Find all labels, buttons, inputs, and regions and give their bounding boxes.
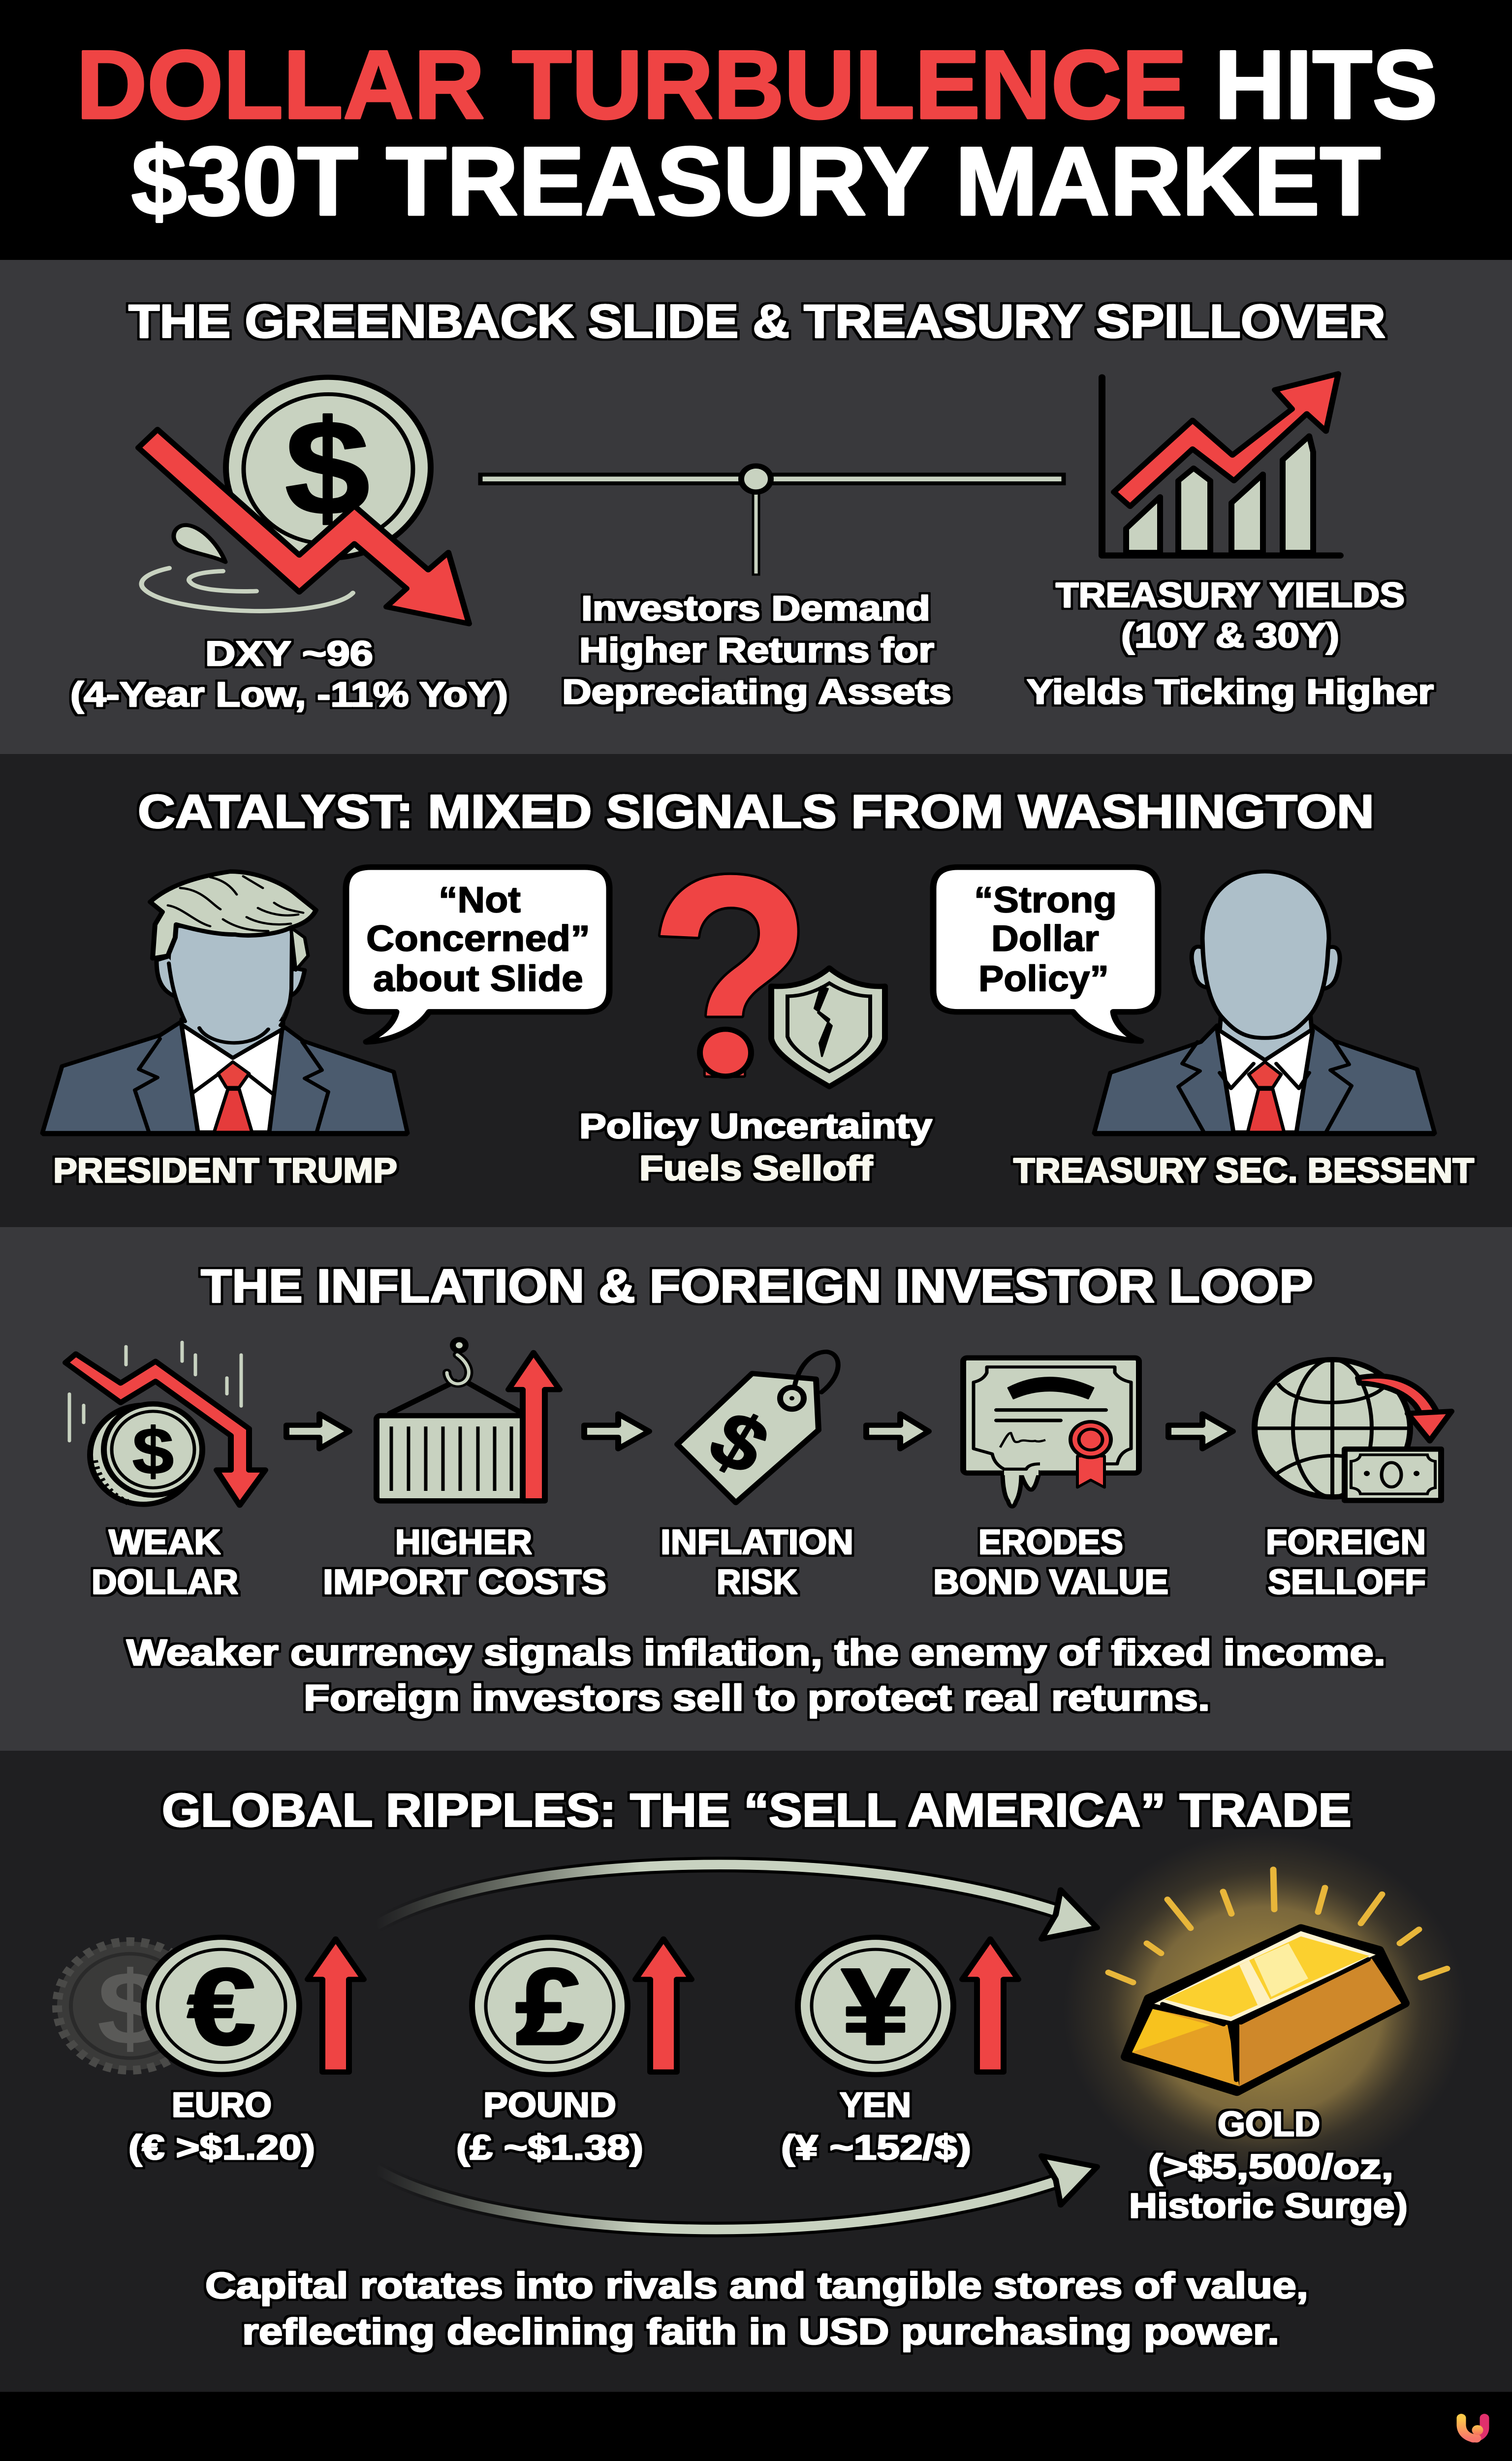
icon: rising yield bar chart (1102, 374, 1340, 556)
label: gold: GOLD (1218, 2105, 1320, 2143)
label: inflation risk: INFLATION (661, 1522, 853, 1561)
arrow 2 (584, 1414, 649, 1449)
label: euro: (€ >$1.20) (128, 2128, 315, 2167)
icon: faded dollar gear coin (57, 1942, 203, 2070)
label: investors demand (562, 589, 951, 711)
speech bubble: strong dollar policy: “Strong (974, 879, 1117, 920)
heading: GLOBAL RIPPLES: THE “SELL AMERICA” TRADE (162, 1784, 1352, 1836)
icon: yen coin and up arrow: ¥ (841, 1946, 910, 2067)
panel: mixed signals from Washington (0, 754, 1512, 1227)
icon: price tag (677, 1352, 838, 1503)
label: treasury yields (1027, 575, 1434, 711)
icon: dollar coin falling with red arrow and splash (138, 378, 469, 624)
icon: dollar coin falling with red arrow and splash: $ (285, 392, 370, 543)
panel: inflation and foreign investor loop (0, 1227, 1512, 1751)
label: inflation risk: RISK (717, 1563, 797, 1601)
icon: eroding bond certificate (963, 1358, 1139, 1507)
speech bubble: strong dollar policy: Dollar (991, 918, 1099, 959)
label: foreign selloff (1266, 1522, 1426, 1601)
label: treasury yields: TREASURY YIELDS (1056, 575, 1405, 614)
label: policy uncertainty: Policy Uncertainty (579, 1106, 932, 1145)
icon: globe with money outflow (1255, 1359, 1451, 1500)
label: foreign selloff: SELLOFF (1268, 1563, 1426, 1601)
label: weak dollar: DOLLAR (92, 1563, 238, 1601)
speech bubble: strong dollar policy: Policy” (978, 958, 1109, 999)
label: erodes bond value: BOND VALUE (933, 1563, 1168, 1601)
label: DXY (70, 634, 508, 714)
conclusion text (205, 2265, 1308, 2352)
label: policy uncertainty (579, 1106, 932, 1188)
conclusion text: Capital rotates into rivals and tangible stores of value, (205, 2265, 1308, 2306)
label: investors demand: Investors Demand (581, 589, 930, 628)
icon: yen coin and up arrow (798, 1937, 1018, 2075)
label: higher import costs (323, 1522, 606, 1601)
arrow 3 (866, 1414, 929, 1449)
label: higher import costs: HIGHER (395, 1522, 532, 1561)
label: policy uncertainty: Fuels Selloff (639, 1149, 873, 1188)
label: pound: (£ ~$1.38) (456, 2128, 643, 2167)
label: treasury yields: Yields Ticking Higher (1027, 672, 1434, 711)
connector: balance bar (480, 466, 1064, 574)
label: yen (781, 2085, 971, 2167)
label: erodes bond value: ERODES (978, 1522, 1123, 1561)
heading: CATALYST: MIXED SIGNALS FROM WASHINGTON (138, 785, 1374, 838)
speech bubble: strong dollar policy (933, 867, 1158, 1041)
label: President Trump: PRESIDENT TRUMP (53, 1151, 397, 1190)
title line 2: $30T TREASURY MARKET (131, 126, 1381, 235)
label: investors demand: Higher Returns for (579, 631, 934, 669)
footer band with logo (0, 2392, 1512, 2461)
title line 1: DOLLAR TURBULENCE HITS (76, 30, 1438, 139)
icon: weak dollar coin with falling arrow: $ (132, 1415, 174, 1488)
header panel (0, 0, 1512, 260)
explanation text: Weaker currency signals inflation, the enemy of fixed income. (126, 1632, 1386, 1673)
speech bubble: not concerned: “Not (439, 879, 521, 920)
icon: euro coin and up arrow (144, 1937, 364, 2075)
label: higher import costs: IMPORT COSTS (323, 1563, 606, 1601)
label: gold: (>$5,500/oz, (1148, 2147, 1393, 2186)
label: investors demand: Depreciating Assets (562, 672, 951, 711)
arrow 4 (1168, 1414, 1233, 1449)
speech bubble: not concerned: about Slide (373, 958, 583, 999)
label: treasury yields: (10Y & 30Y) (1121, 616, 1339, 655)
label: gold: Historic Surge) (1129, 2186, 1408, 2225)
icon: faded dollar gear coin: $ (97, 1950, 163, 2066)
explanation text: Foreign investors sell to protect real returns. (304, 1677, 1210, 1718)
icon: logo (1461, 2418, 1484, 2438)
icon: price tag: $ (694, 1394, 784, 1491)
label: pound: POUND (483, 2085, 616, 2124)
label: gold (1129, 2105, 1408, 2225)
panel: global ripples sell America trade (0, 1751, 1512, 2392)
explanation text (126, 1632, 1386, 1718)
icon: question mark and cracked shield (658, 872, 888, 1089)
label: inflation risk (661, 1522, 853, 1601)
label: weak dollar: WEAK (109, 1522, 220, 1561)
panel: greenback slide and treasury spillover (0, 260, 1512, 754)
icon: weak dollar coin with falling arrow (65, 1342, 265, 1505)
icon: pound coin and up arrow (472, 1937, 692, 2075)
label: pound (456, 2085, 643, 2167)
icon: glowing gold bar (1063, 1832, 1467, 2188)
label: DXY: DXY ~96 (205, 634, 373, 673)
heading: THE INFLATION & FOREIGN INVESTOR LOOP (201, 1260, 1313, 1312)
icon: pound coin and up arrow: £ (515, 1946, 584, 2067)
icon: euro coin and up arrow: € (187, 1946, 256, 2067)
label: erodes bond value (933, 1522, 1168, 1601)
heading: THE GREENBACK SLIDE & TREASURY SPILLOVER (128, 295, 1386, 347)
arrow 1 (286, 1414, 349, 1449)
label: euro: EURO (172, 2085, 272, 2124)
label: foreign selloff: FOREIGN (1266, 1522, 1426, 1561)
label: yen: (¥ ~152/$) (781, 2128, 971, 2167)
label: DXY: (4-Year Low, -11% YoY) (70, 675, 508, 714)
conclusion text: reflecting declining faith in USD purchasing power. (242, 2311, 1279, 2352)
icon: question mark and cracked shield: ? (648, 816, 813, 1136)
figure: Treasury Secretary Bessent (1093, 872, 1436, 1136)
label: euro (128, 2085, 315, 2167)
label: yen: YEN (840, 2085, 911, 2124)
speech bubble: not concerned (346, 867, 609, 1042)
label: weak dollar (92, 1522, 238, 1601)
speech bubble: not concerned: Concerned” (366, 918, 590, 959)
arrow: currencies to gold (upper) (376, 1864, 1097, 1939)
icon: import container with up arrow (377, 1340, 560, 1501)
arrow: currencies to gold (lower) (376, 2156, 1097, 2230)
figure: President Trump (41, 872, 409, 1136)
